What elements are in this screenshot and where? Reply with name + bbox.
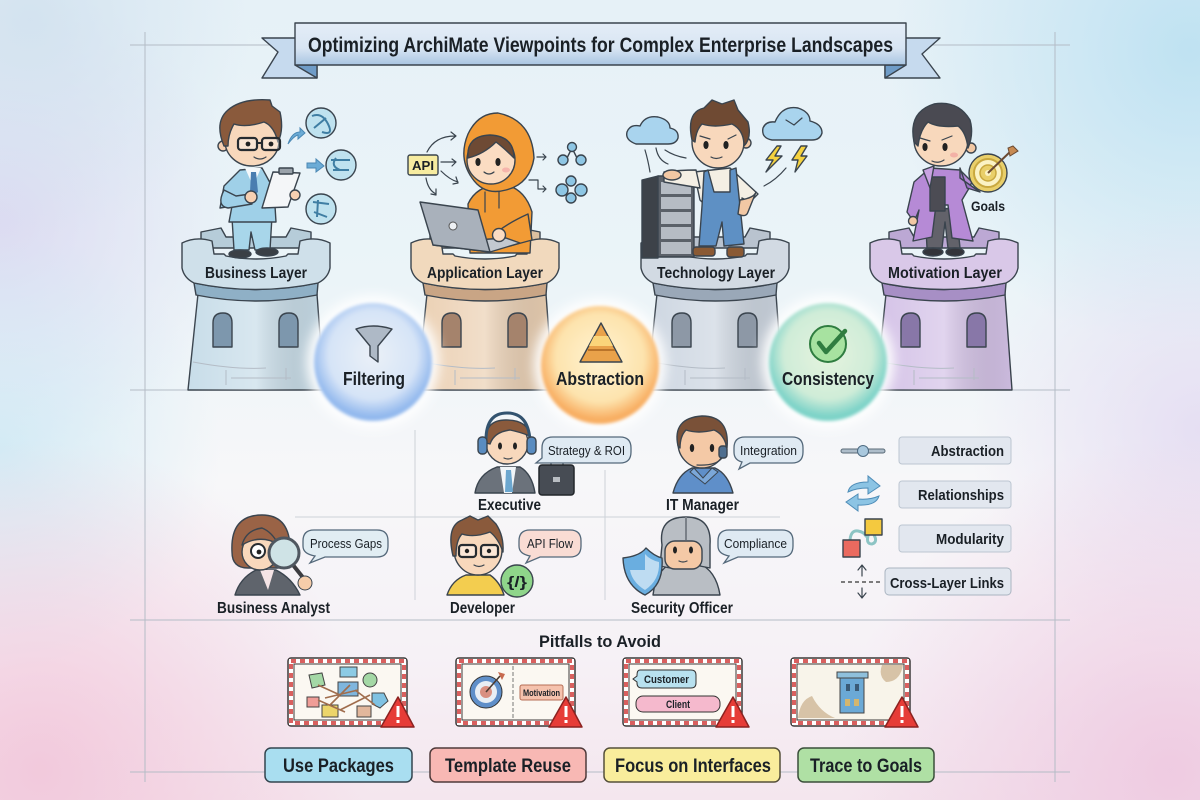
button: trace to goals: Trace to Goals <box>810 756 922 777</box>
button: template reuse <box>430 748 586 782</box>
icon: pyramid <box>580 323 622 362</box>
persona: developer <box>447 516 533 617</box>
speech bubble: integration: Integration <box>740 444 797 458</box>
persona: business analyst: Business Analyst <box>217 600 330 617</box>
tower: motivation layer <box>870 228 1018 390</box>
icon: funnel <box>356 326 392 362</box>
icons: API box with arrows and molecules <box>408 132 587 203</box>
character: strategist in purple coat <box>907 103 980 256</box>
legend item: cross-layer links <box>841 565 1011 598</box>
legend item: cross-layer links: Cross-Layer Links <box>890 575 1004 592</box>
button: use packages: Use Packages <box>283 756 394 777</box>
button: focus on interfaces: Focus on Interfaces <box>615 756 771 777</box>
bubble: consistency: Consistency <box>782 369 874 389</box>
pitfall card: target without context <box>456 658 582 727</box>
legend <box>841 437 1011 598</box>
character: business analyst on tower <box>218 100 300 258</box>
speech bubble: strategy and roi <box>536 437 631 463</box>
pitfall card: target without context: Motivation <box>523 688 560 698</box>
warning sign <box>549 697 582 727</box>
legend item: modularity <box>843 519 1011 557</box>
bubble: filtering <box>307 296 439 428</box>
button: template reuse: Template Reuse <box>445 756 571 777</box>
persona: business analyst <box>217 515 330 617</box>
warning sign <box>885 697 918 727</box>
icons: business diagrams and arrows <box>288 108 356 224</box>
persona: developer: Developer <box>450 600 515 617</box>
legend item: relationships <box>846 476 1011 511</box>
icons: clouds and lightning <box>627 108 822 186</box>
title banner <box>262 23 940 78</box>
pitfall card: tangled diagram <box>288 658 414 727</box>
pitfall card: outdated tower <box>791 658 918 727</box>
pitfall card: customer vs client: Client <box>666 699 690 711</box>
legend item: abstraction: Abstraction <box>931 443 1004 460</box>
code badge: {/} <box>507 574 527 591</box>
legend item: abstraction <box>841 437 1011 464</box>
character: engineer with server rack <box>642 100 758 258</box>
title text: Optimizing ArchiMate Viewpoints for Complex Enterprise Landscapes <box>308 34 893 57</box>
goals label: Goals <box>971 198 1005 214</box>
heading: pitfalls to avoid: Pitfalls to Avoid <box>539 632 661 651</box>
persona: it manager: IT Manager <box>666 497 739 514</box>
label: Technology Layer <box>657 265 775 282</box>
tower: business layer <box>182 228 330 390</box>
bubble: filtering: Filtering <box>343 369 405 389</box>
bubble: abstraction: Abstraction <box>556 369 644 389</box>
bubble: abstraction <box>534 299 666 431</box>
speech bubble: integration <box>734 437 803 469</box>
speech bubble: strategy and roi: Strategy & ROI <box>548 444 625 458</box>
bubble: consistency <box>762 296 894 428</box>
persona: it manager <box>666 416 739 514</box>
icon: goals target <box>969 146 1018 214</box>
icon: check mark <box>810 326 846 362</box>
button: focus on interfaces <box>604 748 780 782</box>
briefcase <box>539 461 574 495</box>
warning sign <box>381 697 414 727</box>
persona: security officer <box>623 517 733 617</box>
speech bubble: process gaps: Process Gaps <box>310 537 382 551</box>
warning sign <box>716 697 749 727</box>
pitfall card: customer vs client: Customer <box>644 674 690 686</box>
persona: executive <box>475 413 574 514</box>
icons: API box with arrows and molecules: API <box>412 158 434 173</box>
label: Motivation Layer <box>888 265 1002 282</box>
speech bubble: process gaps <box>303 530 388 563</box>
label: Business Layer <box>205 265 307 282</box>
label: Application Layer <box>427 265 543 282</box>
persona: executive: Executive <box>478 497 541 514</box>
tower: technology layer <box>641 228 789 390</box>
speech bubble: api flow <box>519 530 581 563</box>
legend item: modularity: Modularity <box>936 531 1005 548</box>
button: use packages <box>265 748 412 782</box>
speech bubble: compliance <box>718 530 793 563</box>
server rack <box>642 176 694 258</box>
character: developer in hoodie with laptop <box>420 113 534 253</box>
speech bubble: compliance: Compliance <box>724 537 787 551</box>
persona: security officer: Security Officer <box>631 600 733 617</box>
tower: application layer <box>411 228 559 390</box>
legend item: relationships: Relationships <box>918 487 1004 504</box>
pitfall card: customer vs client <box>623 658 749 727</box>
button: trace to goals <box>798 748 934 782</box>
speech bubble: api flow: API Flow <box>527 537 574 551</box>
